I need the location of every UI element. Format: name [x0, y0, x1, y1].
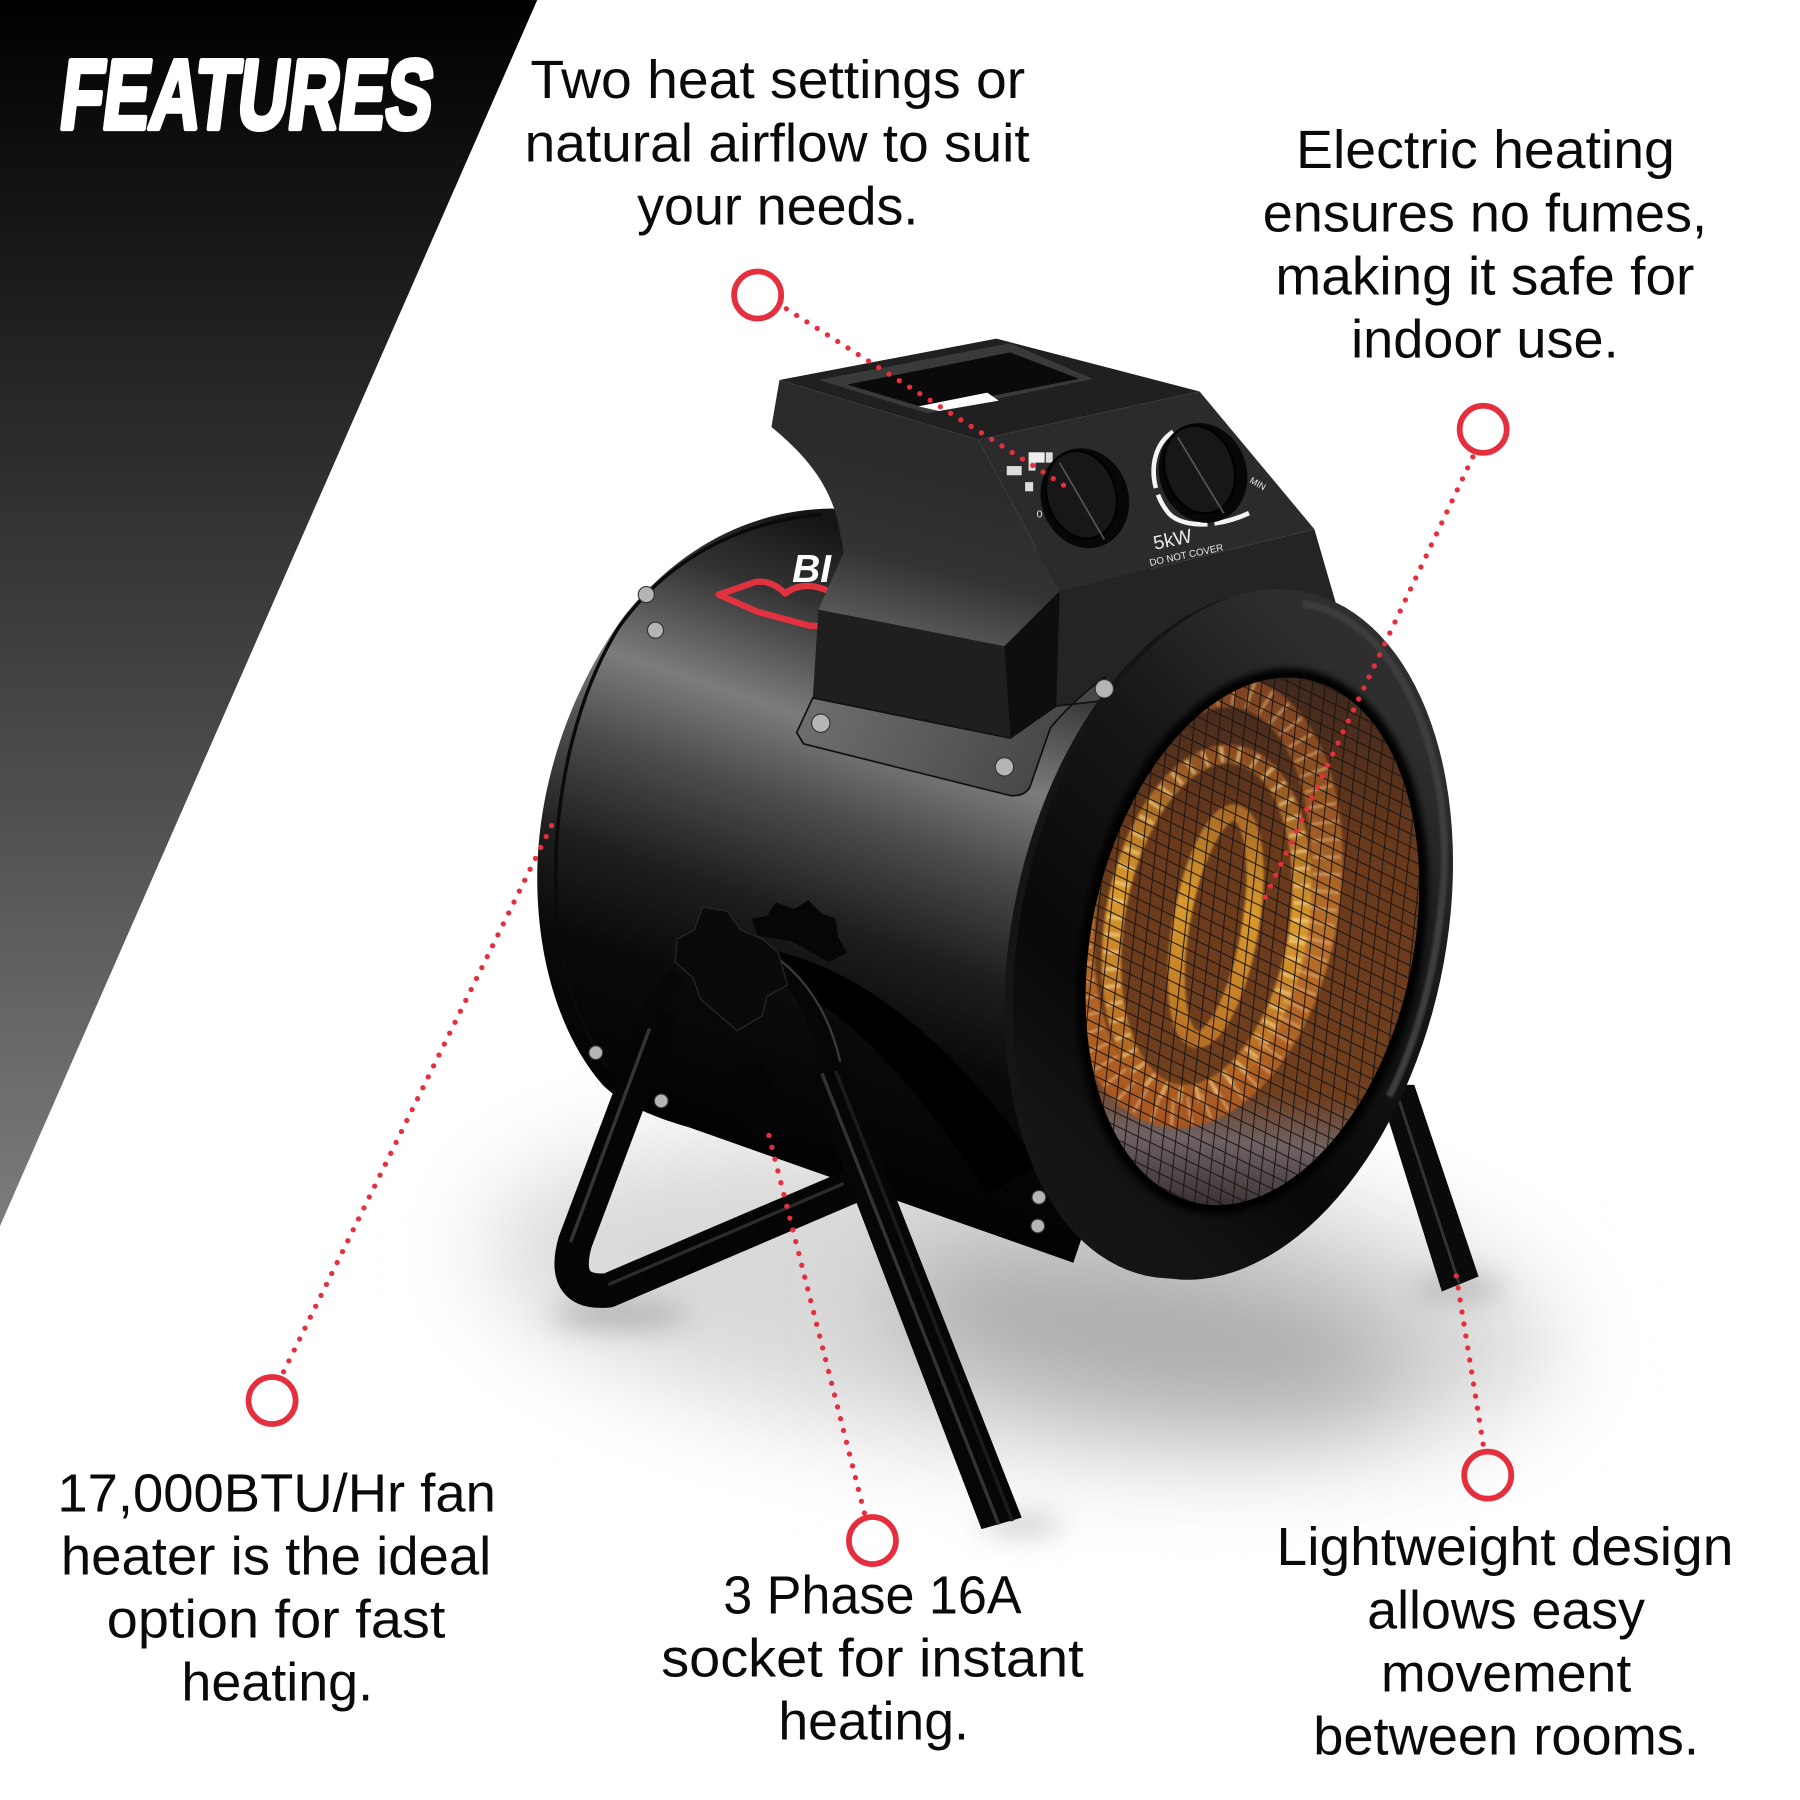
brand logo on body: [719, 548, 832, 627]
text: natural airflow to suit: [525, 113, 1030, 173]
rear leg: [1378, 1085, 1479, 1291]
heating element and mesh: [1086, 678, 1420, 1206]
marker ring: [849, 1517, 896, 1564]
middle coil: [1100, 743, 1312, 1096]
text: ensures no fumes,: [1263, 183, 1707, 243]
cylinder body: [537, 509, 1297, 1263]
callout: electric heating: [1263, 120, 1722, 898]
text: allows easy: [1367, 1580, 1645, 1640]
screws: [589, 587, 1114, 1233]
marker ring: [249, 1377, 296, 1424]
leader line: [284, 822, 553, 1372]
heat dial: [1028, 437, 1142, 560]
box top: [779, 339, 1200, 440]
text: between rooms.: [1313, 1707, 1699, 1767]
long front leg and pivot arm: [645, 948, 1022, 1529]
box front: [1056, 529, 1337, 712]
text: indoor use.: [1351, 310, 1619, 370]
callout: lightweight: [1277, 1272, 1748, 1767]
block side: [1004, 591, 1114, 738]
control labels: MIN: [1248, 475, 1268, 492]
box lower block: [813, 610, 1010, 738]
socket recess: [734, 1063, 775, 1136]
text: 3 Phase 16A: [723, 1565, 1022, 1625]
leader line: [1456, 1272, 1483, 1444]
text: Electric heating: [1296, 120, 1675, 180]
control labels: [1007, 452, 1268, 569]
front star knob: [675, 907, 788, 1031]
triangular stand tube: [571, 1010, 861, 1291]
outer coil: [1086, 682, 1344, 1130]
mounting plate: [797, 677, 1108, 796]
leader line: [767, 1127, 864, 1513]
floor shadow: [469, 1087, 1574, 1533]
callout: fan heater: [57, 822, 553, 1713]
inner coil: [1162, 807, 1270, 1045]
callout: heat settings: [525, 50, 1073, 491]
text: Lightweight design: [1277, 1517, 1733, 1577]
handle opening light: [918, 393, 999, 411]
brand logo on body: BI: [792, 548, 832, 591]
text: 17,000BTU/Hr fan: [57, 1463, 496, 1523]
control labels: 0: [1037, 510, 1043, 521]
text: your needs.: [637, 176, 918, 236]
text: heating.: [181, 1653, 373, 1713]
callout: socket: [661, 1127, 1099, 1752]
control face: [978, 391, 1314, 591]
text: heater is the ideal: [61, 1526, 491, 1586]
rear star knob: [752, 900, 847, 962]
text: Two heat settings or: [530, 50, 1025, 110]
marker ring: [734, 271, 781, 319]
leader line: [786, 309, 1073, 491]
header diagonal panel: [0, 0, 537, 1226]
control box: [771, 339, 1337, 796]
handle rim: [818, 343, 1093, 413]
marker ring: [1464, 1452, 1511, 1499]
control labels: 5kW: [1151, 525, 1195, 555]
leader line: [1265, 457, 1473, 898]
handle slot: [847, 352, 1079, 409]
heater product illustration: [537, 339, 1513, 1529]
front guard ring: [945, 548, 1513, 1321]
rear bracket crescent: [763, 948, 1039, 1194]
text: option for fast: [107, 1590, 445, 1650]
text: heating.: [778, 1692, 969, 1752]
marker ring: [1460, 406, 1507, 453]
title: FEATURES: [55, 39, 440, 149]
text: movement: [1381, 1644, 1631, 1704]
thermostat dial: [1146, 411, 1260, 534]
text: socket for instant: [661, 1629, 1084, 1689]
control labels: DO NOT COVER: [1149, 542, 1224, 569]
box side wall: [771, 380, 1060, 646]
text: making it safe for: [1275, 246, 1694, 306]
